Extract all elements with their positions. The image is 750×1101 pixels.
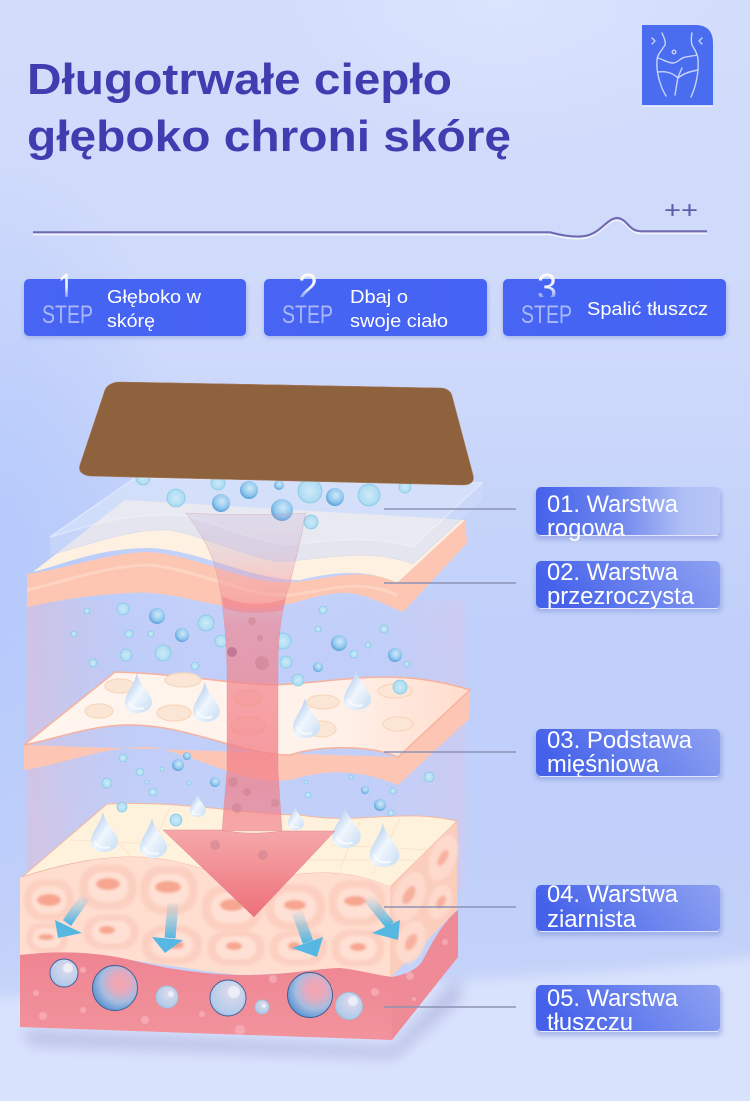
label 04: ziarnista <box>547 906 637 933</box>
fat layer right face <box>391 910 458 1040</box>
big red arrow <box>163 513 335 917</box>
step card 1: Głęboko w <box>107 287 202 307</box>
label 01: rogowa <box>547 515 626 542</box>
block top grid lines <box>70 808 430 875</box>
step card 3: STEP <box>521 301 572 329</box>
label 05: tłuszczu <box>547 1009 633 1036</box>
label 02 <box>535 559 722 612</box>
label 05: 05. Warstwa <box>547 985 679 1012</box>
brown patch <box>79 382 473 485</box>
skin layer: basal cells and fat block <box>20 803 463 1040</box>
icon: waist body <box>642 25 713 106</box>
label 01: 01. Warstwa <box>547 491 679 518</box>
label 04 <box>535 881 722 936</box>
step card 3 <box>503 267 727 338</box>
label 03: mięśniowa <box>547 751 660 778</box>
block drop shadow <box>22 975 460 1058</box>
step card 2: 2 <box>298 267 318 309</box>
step card 3: 3 <box>537 267 557 309</box>
label 02: przezroczysta <box>547 583 695 610</box>
small blue bubbles <box>71 471 434 826</box>
small blue arrows <box>55 897 400 957</box>
wave divider line with plus signs: ++ <box>664 197 698 224</box>
label 01 <box>535 487 722 542</box>
step card 1: STEP <box>42 301 93 329</box>
label 05 <box>535 985 722 1036</box>
water drops <box>91 670 400 867</box>
title: głęboko chroni skórę <box>27 112 511 161</box>
label 02: 02. Warstwa <box>547 559 679 586</box>
block top surface <box>22 803 457 887</box>
step card 1: 1 <box>58 267 74 309</box>
block cell right face <box>390 821 457 978</box>
layer 01: horny glass sheet <box>50 478 483 564</box>
wave divider line with plus signs <box>33 197 707 239</box>
step card 1: skórę <box>107 311 155 331</box>
step card 2: Dbaj o <box>350 287 408 307</box>
label 04: 04. Warstwa <box>547 881 679 908</box>
block cell front face <box>20 857 391 978</box>
solid blue bubbles <box>149 480 402 811</box>
soft side walls <box>27 600 465 890</box>
layer 02: translucent skin <box>27 500 467 612</box>
layer 03: muscle base <box>24 672 470 785</box>
fat layer front <box>20 952 392 1040</box>
step card 2: STEP <box>282 301 333 329</box>
skin diagram <box>20 471 483 1058</box>
leader lines <box>384 509 516 1007</box>
step card 3: Spalić tłuszcz <box>587 299 708 319</box>
step card 2: swoje ciało <box>350 311 448 331</box>
label 03: 03. Podstawa <box>547 727 693 754</box>
title: Długotrwałe ciepło <box>27 55 452 104</box>
label 03 <box>535 727 722 780</box>
fat cell bubbles <box>50 959 362 1020</box>
step card 1 <box>24 267 247 338</box>
step card 2 <box>264 267 488 338</box>
title <box>27 55 511 161</box>
